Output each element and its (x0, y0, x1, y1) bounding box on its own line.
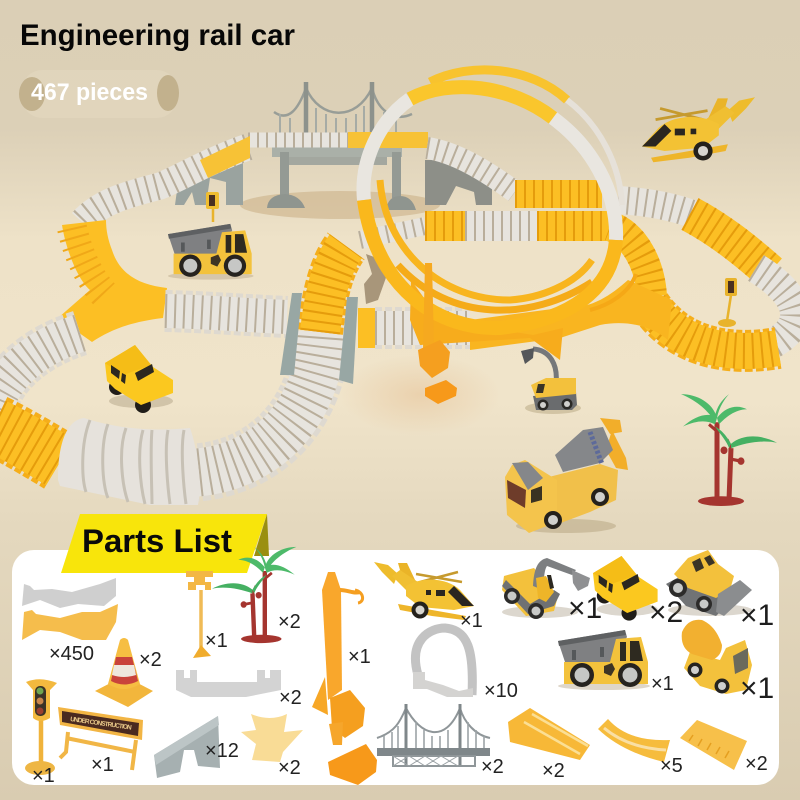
count curve ×5: ×5 (660, 755, 683, 777)
part: street lamp (186, 571, 228, 658)
traffic sign (206, 192, 219, 222)
part: construction barrier (58, 707, 143, 776)
part: traffic light (25, 679, 57, 787)
banner: parts list: Parts List (82, 523, 232, 559)
count jeep ×2: ×2 (649, 596, 683, 629)
part: cross junction (241, 714, 303, 779)
loop foot (410, 280, 563, 360)
track: right junction (470, 280, 672, 350)
count cross ×2: ×2 (278, 757, 301, 779)
loop ring (363, 70, 622, 328)
title: Engineering rail car (20, 19, 295, 52)
count palm ×2: ×2 (278, 611, 301, 633)
bridge (248, 82, 428, 210)
helicopter (642, 97, 755, 162)
excavator (521, 348, 581, 414)
track: tunnel (58, 418, 200, 505)
right traffic sign (718, 278, 737, 327)
palm tree (681, 394, 777, 506)
count barrier ×1: ×1 (91, 754, 114, 776)
part: construction barrier: UNDER CONSTRUCTION (70, 716, 132, 732)
part: jeep (593, 556, 683, 629)
count support ×2: ×2 (279, 687, 302, 709)
track: large white S curve (190, 332, 322, 473)
count bridge ×2: ×2 (481, 756, 504, 778)
jeep (105, 345, 173, 413)
ground shadow (240, 191, 500, 435)
count flat ×2: ×2 (745, 753, 768, 775)
track: left yellow junction (58, 220, 167, 342)
track: far left white (0, 333, 80, 408)
banner shadow tab (254, 514, 269, 556)
part: bridge support (176, 670, 302, 709)
count slope ×12: ×12 (205, 740, 239, 762)
part: arch support (413, 628, 518, 702)
part: excavator (502, 558, 602, 625)
count heli ×1: ×1 (460, 610, 483, 632)
piece count badge: 467 pieces (31, 79, 148, 106)
part: cement mixer (682, 620, 774, 705)
count lamp ×1: ×1 (205, 630, 228, 652)
banner: parts list (61, 514, 267, 573)
right ramp support (425, 160, 492, 205)
track: junction inner curve (590, 274, 636, 310)
part: traffic cone (95, 638, 162, 707)
brown support (364, 254, 388, 304)
track: upper right ramp and bands (427, 148, 795, 345)
crane (418, 263, 457, 404)
count excavator ×1: ×1 (568, 592, 602, 625)
part: road roller (666, 550, 774, 632)
track: centre left white straight (165, 311, 287, 317)
cement mixer truck (505, 418, 628, 533)
count ×450: ×450 (49, 643, 94, 665)
part: palm tree (212, 547, 301, 643)
parts panel (12, 550, 779, 785)
part: helicopter (374, 562, 483, 632)
part: suspension bridge (377, 704, 504, 778)
part: curved track (598, 719, 683, 777)
rising section side rails (280, 293, 358, 384)
count mixer ×1: ×1 (740, 672, 774, 705)
count crane ×1: ×1 (348, 646, 371, 668)
track: centre right horizontal (358, 308, 470, 348)
count arch ×10: ×10 (484, 680, 518, 702)
track: upper middle white and yellow band (360, 226, 652, 296)
count ×2: ×2 (139, 649, 162, 671)
track: lower left yellow (0, 425, 60, 462)
play scene: track layout and vehicles (0, 70, 795, 533)
left ramp support (175, 146, 245, 205)
dump truck (168, 224, 254, 280)
part: slope support (154, 716, 239, 778)
part: flat track (680, 720, 768, 775)
track: centre yellow rising section (320, 246, 346, 332)
track: right lower yellow band (650, 305, 778, 351)
part: track pieces (22, 578, 118, 665)
part: ramp (508, 708, 590, 782)
count ramp ×2: ×2 (542, 760, 565, 782)
part: crane (312, 572, 377, 785)
track: upper left white curve (82, 136, 250, 222)
count roller ×1: ×1 (740, 599, 774, 632)
count dump ×1: ×1 (651, 673, 674, 695)
part: dump truck (558, 630, 674, 695)
count traffic ×1: ×1 (32, 765, 55, 787)
piece count badge (19, 70, 179, 118)
